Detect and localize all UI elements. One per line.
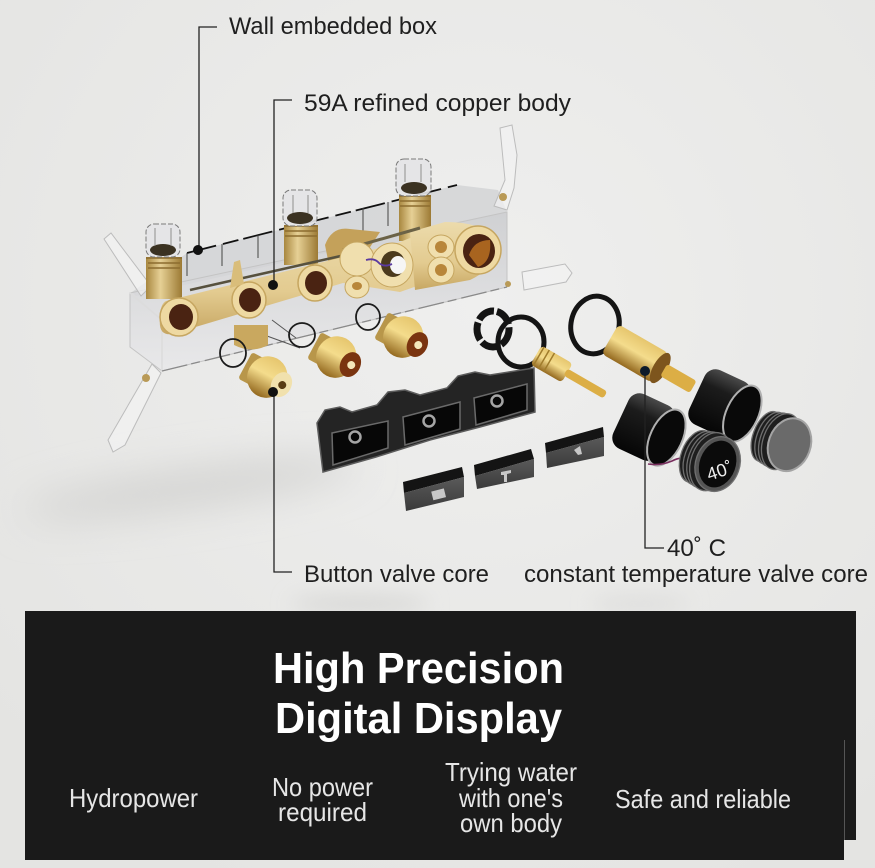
- illustration: digital display knob: [672, 423, 749, 500]
- leader: copper body: [268, 100, 292, 290]
- feature: trying water: with one's: [458, 783, 563, 813]
- illustration: brass valve neck caps: [146, 159, 431, 350]
- illustration: thermostatic brass valve cores: [530, 324, 702, 405]
- illustration: refined copper body: [160, 222, 501, 336]
- feature: trying water: own body: [460, 808, 562, 838]
- illustration: black mode buttons: [403, 427, 604, 511]
- feature: trying water: Trying water: [445, 757, 577, 787]
- label: constant temperature valve core: constant temperature valve core: [524, 561, 868, 588]
- feature: no power required: No power: [272, 772, 373, 802]
- heading: [273, 644, 564, 743]
- illustration: digital display knob: 40˚: [704, 458, 735, 485]
- feature: safe and reliable: Safe and reliable: [615, 784, 791, 814]
- illustration: black mounting frame: [317, 368, 535, 472]
- illustration: rear black knob: [744, 404, 819, 479]
- heading: High Precision: [273, 644, 564, 693]
- label: button valve core: Button valve core: [304, 561, 489, 588]
- label: copper body: 59A refined copper body: [304, 90, 571, 117]
- illustration: temperature purple wire: [648, 458, 684, 465]
- illustration: black seal rings: [477, 292, 625, 367]
- feature: no power required: required: [278, 797, 367, 827]
- label: 40 degrees C: 40˚ C: [667, 535, 726, 562]
- heading: Digital Display: [275, 694, 563, 743]
- leader: wall embedded box: [193, 27, 217, 255]
- leader: button valve core: [268, 387, 292, 572]
- illustration: O-rings: [220, 304, 380, 367]
- feature: hydropower: Hydropower: [69, 783, 198, 813]
- illustration: brass button valve cores: [235, 307, 436, 408]
- panel: high precision digital display: [25, 611, 856, 860]
- feature: no power required: [272, 772, 373, 827]
- label: wall embedded box: Wall embedded box: [229, 13, 437, 40]
- illustration: black sleeves: [608, 365, 769, 472]
- feature: trying water: [445, 757, 577, 838]
- leader: constant temperature valve core: [640, 366, 664, 548]
- illustration: clear wall embedded box with brackets: [104, 125, 572, 452]
